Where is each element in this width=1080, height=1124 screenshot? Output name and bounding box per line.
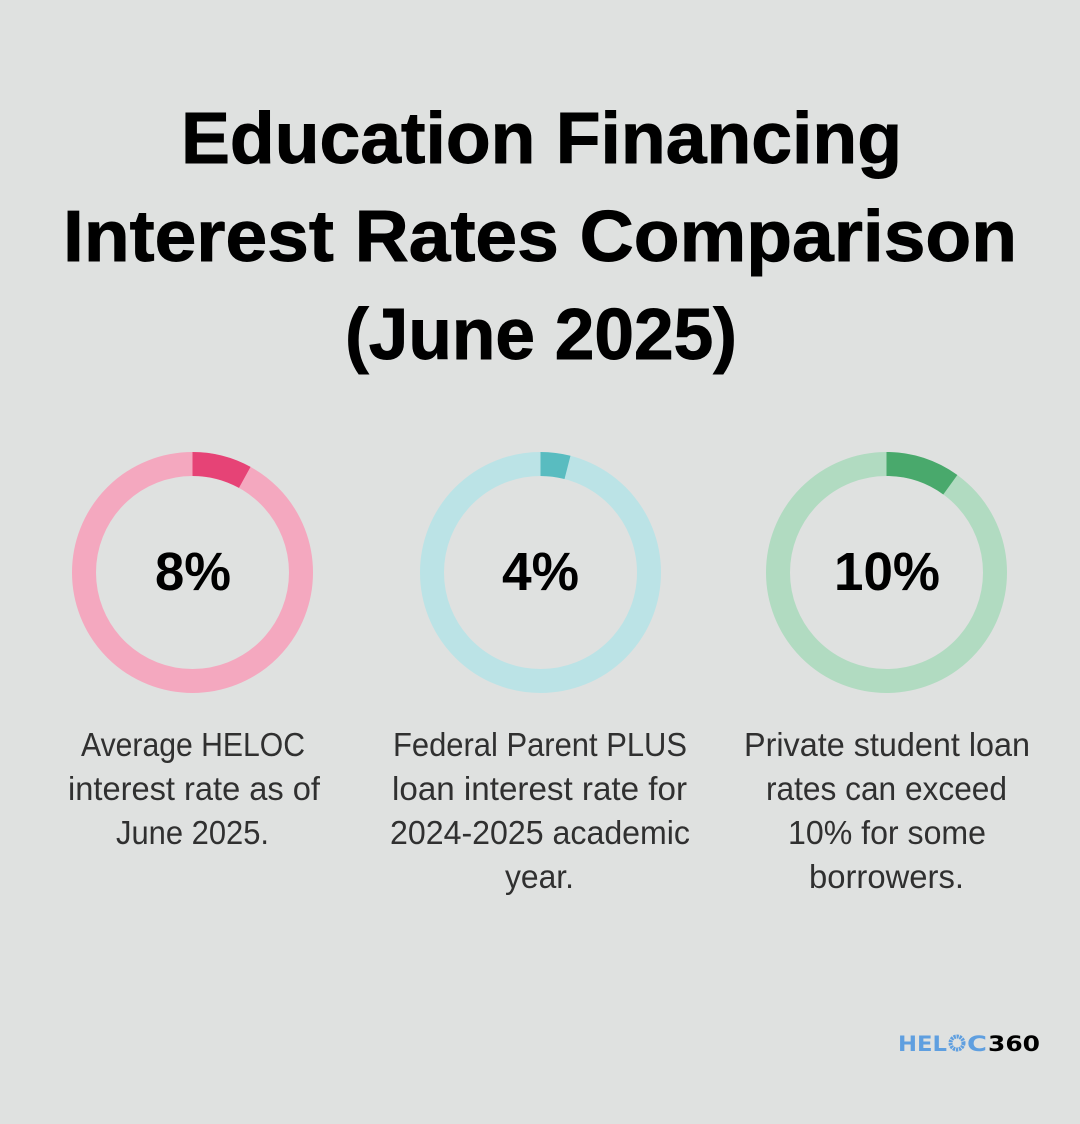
description: Parent PLUS rate: year.: [505, 858, 574, 895]
description: private loan rate: [744, 726, 1030, 895]
title: [63, 99, 1017, 375]
description: Parent PLUS rate: Federal Parent PLUS: [393, 726, 687, 763]
title: Education Financing: [181, 99, 902, 179]
panel: Federal Parent PLUS rate: [390, 464, 690, 895]
panel: HELOC rate: [68, 464, 321, 851]
description: Parent PLUS rate: 2024-2025 academic: [390, 814, 690, 851]
description: private loan rate: borrowers.: [809, 858, 964, 895]
description: HELOC rate: [68, 726, 321, 851]
description: private loan rate: Private student loan: [744, 726, 1030, 763]
logo: HELOC360: [898, 1032, 1040, 1056]
description: private loan rate: 10% for some: [788, 814, 986, 851]
description: HELOC rate: Average HELOC: [81, 726, 305, 763]
donut chart: 8%: [84, 464, 301, 681]
description: HELOC rate: June 2025.: [116, 814, 269, 851]
title: Interest Rates Comparison: [63, 197, 1017, 277]
value: 4%: 4%: [502, 542, 579, 602]
icon: swirl O: [950, 1036, 964, 1050]
value: 10%: 10%: [834, 542, 940, 602]
donut chart: 4%: [432, 464, 649, 681]
logo: HELOC360: C: [967, 1032, 987, 1056]
donut chart: 10%: [778, 464, 995, 681]
panel: private student loan rate: [744, 464, 1030, 895]
logo: HELOC360: HEL: [898, 1032, 947, 1056]
description: Parent PLUS rate: loan interest rate for: [392, 770, 687, 807]
description: private loan rate: rates can exceed: [766, 770, 1007, 807]
logo: HELOC360: 360: [988, 1032, 1040, 1056]
value: 8%: 8%: [155, 542, 231, 602]
title: (June 2025): [345, 295, 737, 375]
description: Parent PLUS rate: [390, 726, 690, 895]
description: HELOC rate: interest rate as of: [68, 770, 321, 807]
